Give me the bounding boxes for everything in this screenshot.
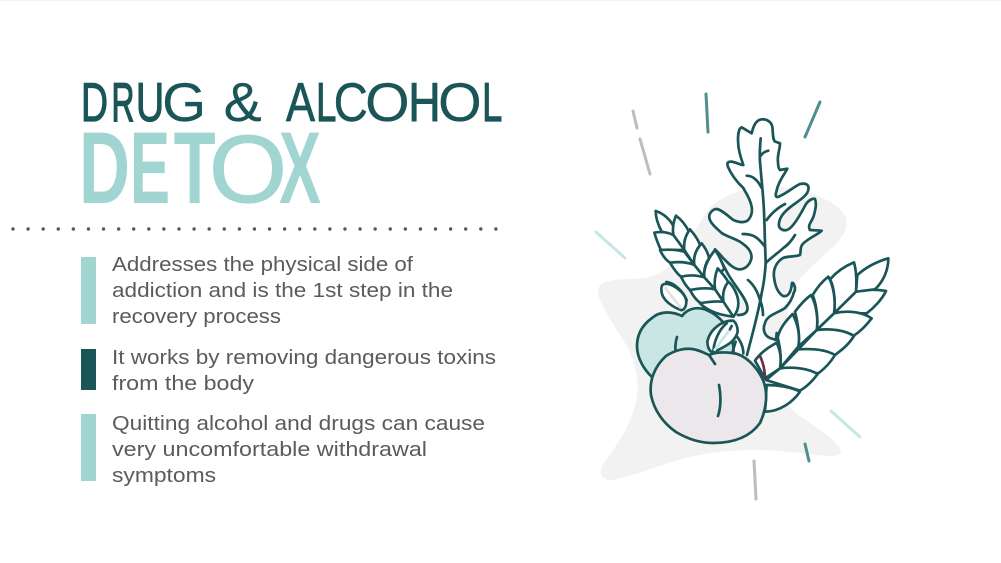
bullet 2: It works by removing dangerous toxins xyxy=(112,347,496,369)
title line: drug and alcohol: U xyxy=(136,71,164,133)
title line: drug and alcohol: A xyxy=(286,71,315,133)
background blob xyxy=(598,186,847,480)
bullet 3: very uncomfortable withdrawal xyxy=(112,439,427,461)
small top leaf xyxy=(661,282,687,310)
title line: drug and alcohol: C xyxy=(334,71,368,133)
title line: detox: X xyxy=(279,111,321,225)
title line: drug and alcohol: R xyxy=(112,71,134,133)
title line: drug and alcohol: L xyxy=(482,71,502,133)
left leaf branch xyxy=(654,211,738,317)
title line: detox: D xyxy=(79,111,130,225)
bullet 1: Addresses the physical side of xyxy=(112,254,413,276)
title xyxy=(79,71,502,225)
title line: detox: E xyxy=(130,111,170,225)
title line: drug and alcohol: L xyxy=(316,71,336,133)
teal apple xyxy=(637,308,734,378)
pale peach fruit xyxy=(651,349,766,443)
title line: drug and alcohol: H xyxy=(408,71,441,133)
title line: drug and alcohol: O xyxy=(365,71,410,133)
bullet list xyxy=(81,254,496,487)
right leaf branch xyxy=(755,258,888,412)
bullet 3 xyxy=(81,413,485,487)
sparkle dashes xyxy=(596,94,860,499)
title line: drug and alcohol: O xyxy=(438,71,482,133)
bullet 1: addiction and is the 1st step in the xyxy=(112,280,453,302)
bullet 2: from the body xyxy=(112,373,254,395)
central oak-like leaf xyxy=(709,119,822,362)
title line: detox: O xyxy=(209,116,287,223)
illustration: botanical arrangement xyxy=(596,94,888,499)
title line: drug and alcohol: G xyxy=(162,71,206,133)
title line: drug and alcohol: D xyxy=(81,71,108,133)
bullet 3: symptoms xyxy=(112,465,216,487)
small leaf on apple xyxy=(707,321,743,353)
bullet 3: Quitting alcohol and drugs can cause xyxy=(112,413,485,435)
bullet 2 xyxy=(81,347,496,395)
title line: drug and alcohol: & xyxy=(224,71,262,133)
bullet 1 xyxy=(81,254,453,328)
bullet 1: recovery process xyxy=(112,306,281,328)
title line: detox: T xyxy=(174,111,216,225)
